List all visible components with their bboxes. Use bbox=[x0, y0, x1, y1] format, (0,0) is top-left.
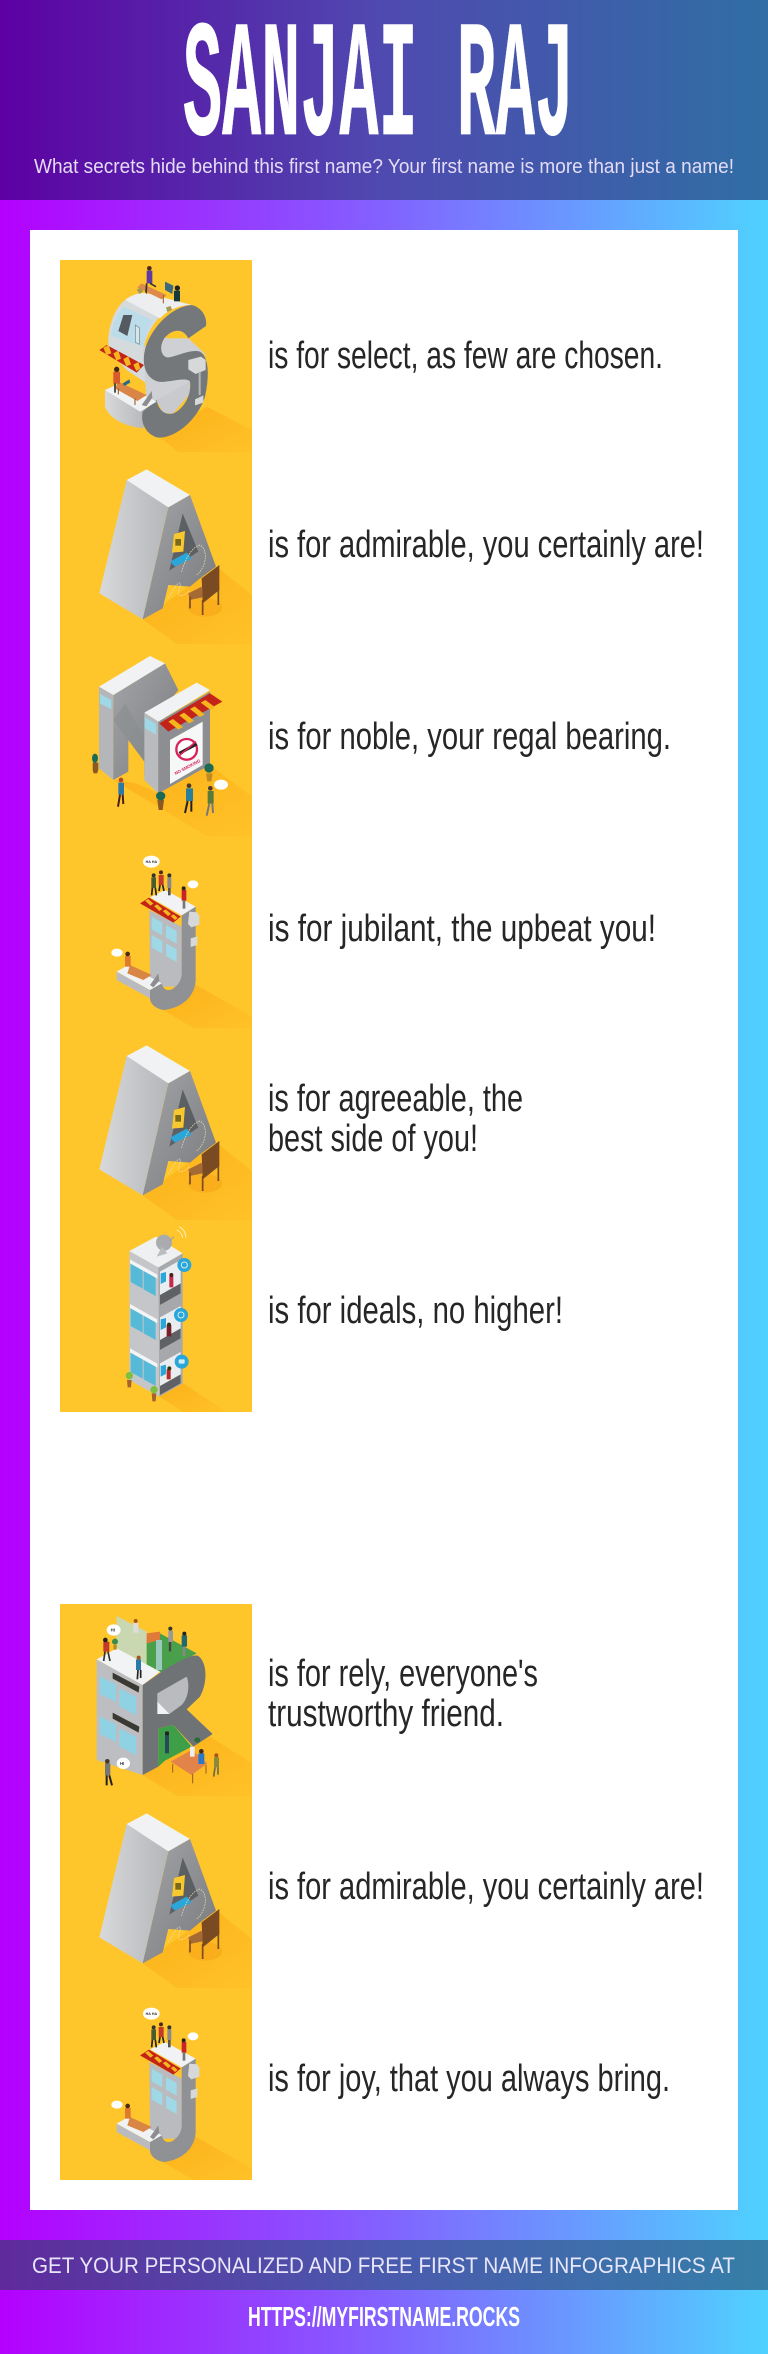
caption: R two lines: is for rely, everyone's bbox=[268, 1653, 538, 1695]
icon: letter R tile: HI bbox=[120, 1761, 124, 1766]
caption: A two lines: is for agreeable, the bbox=[268, 1078, 523, 1120]
icon: letter A tile bbox=[60, 452, 252, 644]
footer url: HTTPS://MYFIRSTNAME.ROCKS bbox=[248, 2301, 520, 2332]
caption: A two lines: best side of you! bbox=[268, 1118, 478, 1160]
caption: R two lines: trustworthy friend. bbox=[268, 1693, 504, 1735]
icon: letter S tile bbox=[60, 260, 252, 452]
icon: letter R tile: HI bbox=[111, 1628, 115, 1633]
icon: letter J tile (second) bbox=[60, 1988, 252, 2180]
icon: letter J tile bbox=[60, 836, 252, 1028]
footer band bbox=[0, 2240, 768, 2290]
icon: letter A tile (second) bbox=[60, 1028, 252, 1220]
caption: I: is for ideals, no higher! bbox=[268, 1290, 563, 1332]
icon: letter J tile (second): HA HA bbox=[146, 2012, 157, 2016]
icon: letter N tile: NO SMOKING bbox=[174, 758, 202, 776]
subtitle: What secrets hide behind this first name? Your first name is more than just a name! bbox=[34, 155, 734, 178]
caption: J: is for jubilant, the upbeat you! bbox=[268, 908, 656, 950]
icon: letter N tile bbox=[60, 644, 252, 836]
icon: letter R tile bbox=[60, 1604, 252, 1796]
footer call to action: GET YOUR PERSONALIZED AND FREE FIRST NAME INFOGRAPHICS AT bbox=[32, 2253, 735, 2278]
panel: white content card bbox=[30, 230, 738, 2210]
header band bbox=[0, 0, 768, 200]
icon: letter J tile: HA HA bbox=[146, 860, 157, 864]
icon: letter A tile (third) bbox=[60, 1796, 252, 1988]
icon: letter I tile bbox=[60, 1220, 252, 1412]
